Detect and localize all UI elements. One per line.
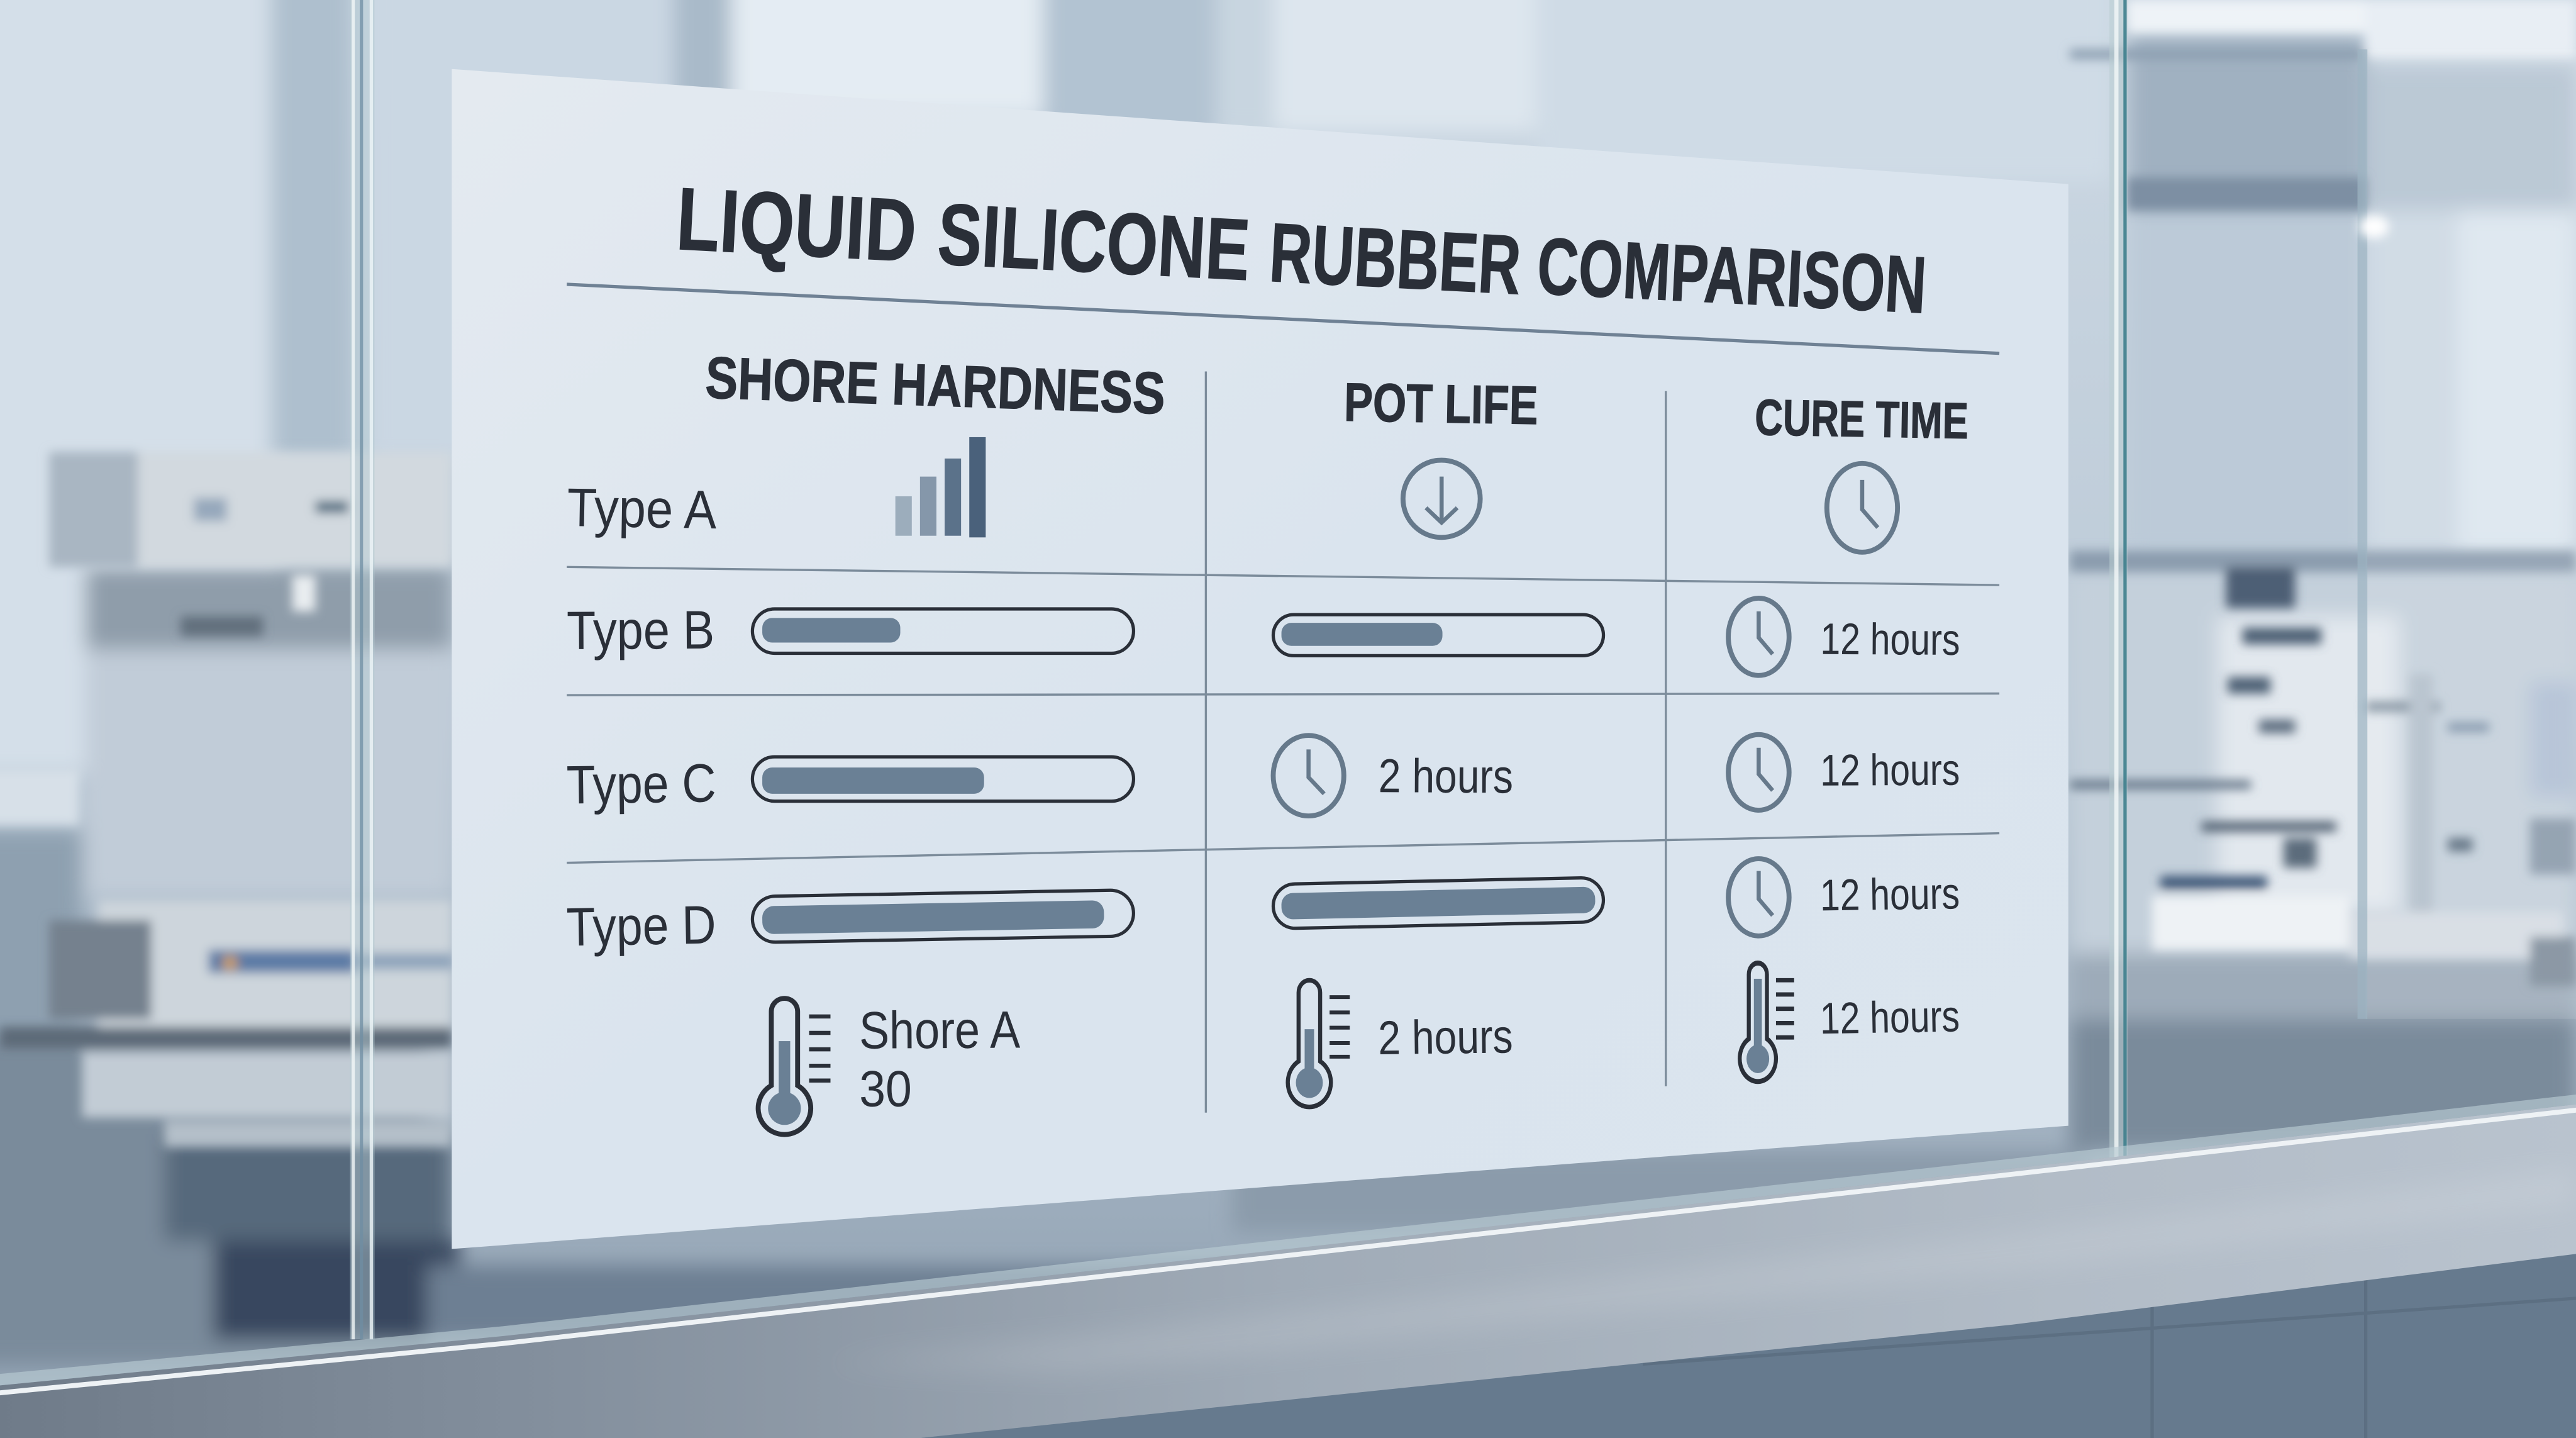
icon: clock type c: [1728, 735, 1789, 810]
column: pot life: [1273, 372, 1604, 1107]
bar: type d pot life: [1273, 878, 1604, 928]
text: 12 hours type c: 12 hours: [1820, 745, 1960, 795]
bar: type b hardness: [752, 609, 1133, 653]
title rule: [567, 284, 1999, 354]
text: 2 hours: 2 hours: [1379, 749, 1513, 803]
table grid: [567, 371, 1999, 1113]
second glass reflection: [2366, 49, 2576, 1019]
text: 12 hours thermometer: 12 hours: [1819, 991, 1960, 1043]
label: type a: Type A: [567, 477, 718, 540]
text: shore a 30: 30: [859, 1061, 912, 1117]
text: 12 hours type b: 12 hours: [1820, 614, 1960, 664]
label: type d: Type D: [566, 895, 716, 958]
column: shore hardness: [566, 344, 1167, 1135]
icon: clock type d: [1728, 859, 1789, 936]
area below rail: [920, 1252, 2576, 1438]
sign panel: [452, 69, 2068, 1249]
icon: clock header: [1827, 464, 1897, 552]
text: 12 hours type d: 12 hours: [1819, 868, 1960, 920]
icon: clock type b: [1728, 598, 1789, 676]
bar: type c hardness: [752, 757, 1133, 801]
glass panel edges: [350, 0, 2128, 1438]
icon: rising bars: [896, 437, 985, 537]
steel rail: [0, 1095, 2576, 1438]
heading: cure time: CURE TIME: [1755, 389, 1969, 450]
icon: clock type c pot life: [1273, 735, 1344, 816]
title: COMPARISON: [1535, 221, 1929, 331]
heading: pot life: POT LIFE: [1343, 372, 1538, 436]
title: LIQUID: [674, 169, 919, 281]
heading: shore hardness: SHORE HARDNESS: [704, 344, 1167, 426]
column: cure time: [1728, 389, 1969, 1081]
icon: down arrow circle: [1403, 460, 1480, 537]
title: SILICONE: [935, 186, 1252, 299]
label: type c: Type C: [566, 753, 716, 816]
title: RUBBER: [1267, 206, 1523, 313]
text: 2 hours thermometer: 2 hours: [1378, 1010, 1513, 1065]
icon: thermometer pot life: [1288, 980, 1350, 1107]
title: [674, 169, 1929, 331]
text: shore a 30: [859, 1000, 1021, 1117]
label: type b: Type B: [567, 600, 714, 661]
text: shore a 30: Shore A: [859, 1000, 1021, 1060]
icon: thermometer cure time: [1740, 963, 1794, 1081]
icon: thermometer large: [758, 998, 830, 1135]
bar: type b pot life: [1273, 615, 1604, 655]
bar: type d hardness: [752, 890, 1134, 942]
